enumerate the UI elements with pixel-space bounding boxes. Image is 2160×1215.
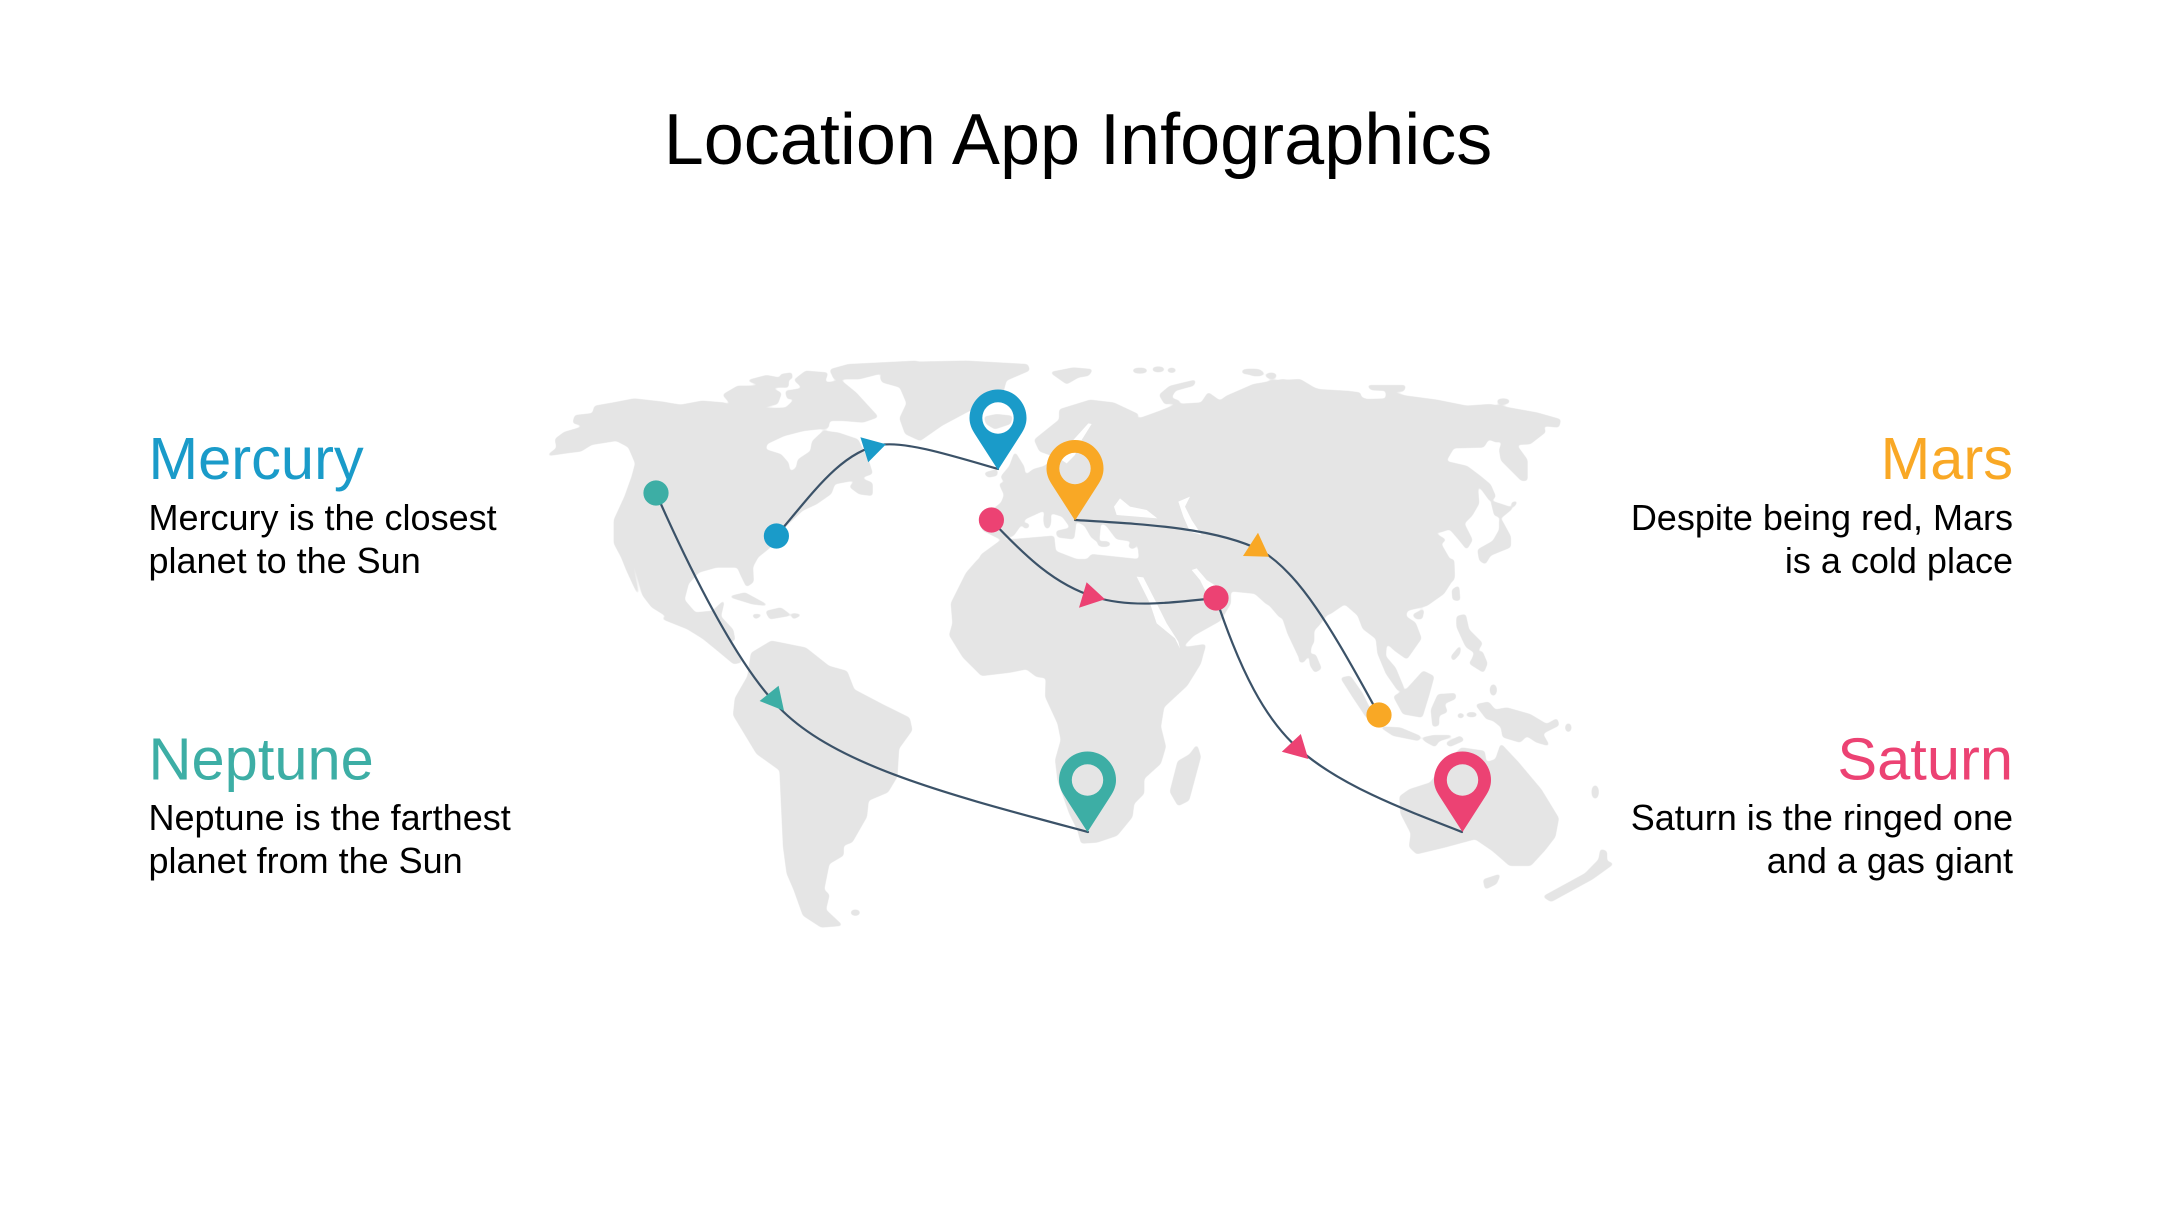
- map: South-East Asia and islands: [1300, 560, 1571, 746]
- map: North America and Greenland: [549, 362, 1029, 640]
- map: Europe and western Asia: [970, 367, 1360, 620]
- pin: Neptune: [1059, 752, 1116, 832]
- route: Mars: [1075, 520, 1379, 715]
- text block: Mercury: Mercury: [148, 425, 364, 492]
- text block: Mercury: planet to the Sun: [148, 540, 421, 581]
- text block: Mars: [1631, 425, 2013, 581]
- text block: Saturn: Saturn is the ringed one: [1631, 797, 2013, 838]
- text block: Saturn: Saturn: [1837, 726, 2013, 792]
- pin: Mercury: [970, 390, 1026, 470]
- route: Mercury: [776, 444, 998, 536]
- map: Africa, Arabia, India, Madagascar: [950, 560, 1330, 843]
- start dot: Neptune: [643, 480, 669, 506]
- route: Saturn second leg: [1216, 598, 1462, 832]
- text block: Mars: is a cold place: [1785, 540, 2013, 581]
- map: Central and South America: [662, 618, 911, 927]
- text block: Neptune: Neptune is the farthest: [148, 797, 511, 838]
- start dot: Saturn: [979, 507, 1004, 533]
- arrow: Mars: [1243, 533, 1269, 557]
- text block: Mars: Mars: [1881, 425, 2013, 492]
- start dot: Mercury: [764, 523, 789, 549]
- inland seas: [1057, 423, 1220, 649]
- text block: Mars: Despite being red, Mars: [1631, 497, 2013, 538]
- pin: Saturn: [1434, 752, 1491, 832]
- start dot: Mars: [1366, 702, 1392, 728]
- pin: Mars: [1046, 440, 1104, 520]
- map: East Asia and Japan: [1250, 371, 1560, 580]
- text block: Neptune: [148, 726, 511, 881]
- route: Neptune: [656, 493, 1088, 832]
- arrow: Saturn second leg: [1282, 734, 1308, 759]
- title: Location App Infographics: [664, 100, 1492, 180]
- route: Saturn first leg: [991, 520, 1216, 604]
- text block: Saturn: [1631, 726, 2013, 881]
- text block: Neptune: Neptune: [148, 726, 374, 792]
- text block: Mercury: Mercury is the closest: [148, 497, 497, 538]
- text block: Neptune: planet from the Sun: [148, 840, 463, 881]
- arrow: Mercury: [860, 437, 886, 462]
- map: Australia and New Zealand: [1400, 745, 1612, 901]
- world map: [549, 362, 1612, 927]
- text block: Mercury: [148, 425, 497, 581]
- arrow: Saturn first leg: [1079, 582, 1105, 608]
- arrow: Neptune: [760, 686, 784, 711]
- text block: Saturn: and a gas giant: [1767, 840, 2013, 881]
- waypoint dot: Saturn: [1203, 585, 1229, 611]
